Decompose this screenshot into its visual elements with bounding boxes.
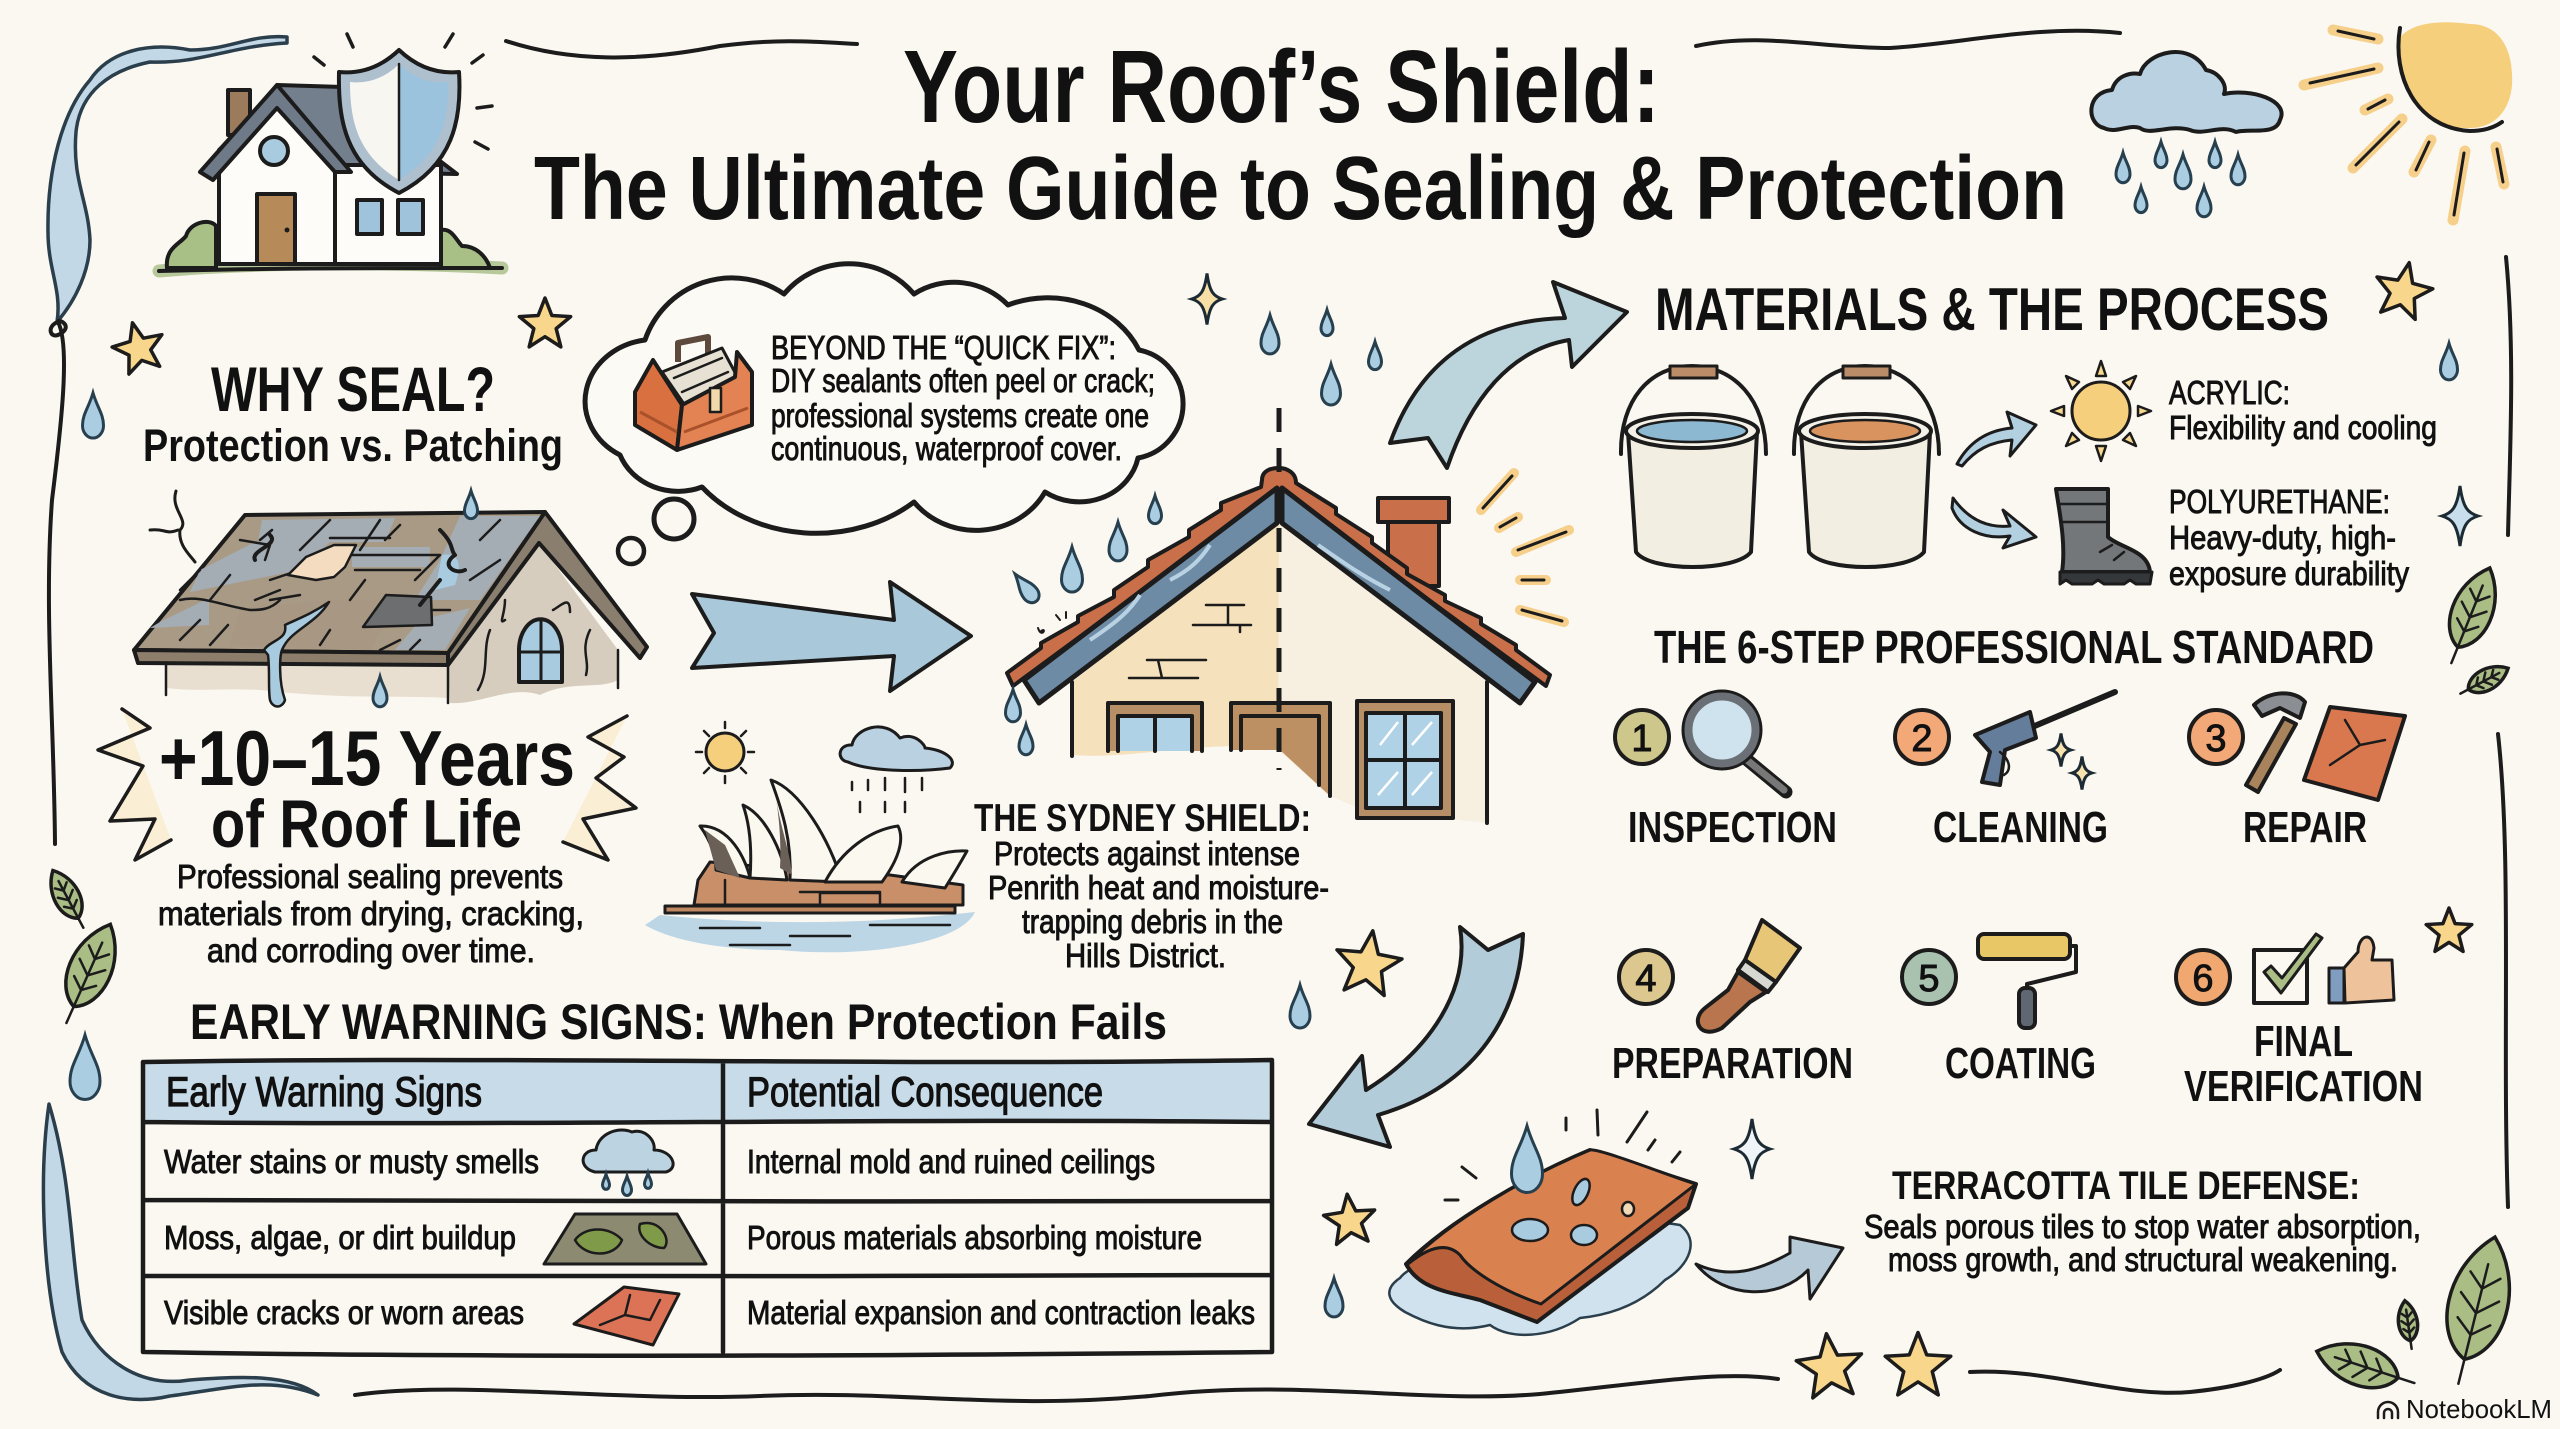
icon: rain cloud [2091, 52, 2282, 217]
heading: early warning signs: EARLY WARNING SIGNS: When Protection Fails [190, 994, 1167, 1050]
illustration: terracotta tile with water beads [1389, 1110, 1696, 1335]
arrow: to materials section [1390, 282, 1627, 468]
step 4: preparation: 4 [1635, 958, 1657, 1000]
text: beyond the quick fix: continuous, waterproof cover. [771, 430, 1122, 467]
text: polyurethane: POLYURETHANE: [2169, 483, 2390, 520]
decorative leaves [42, 560, 2523, 1402]
arrow: to acrylic [1957, 412, 2036, 466]
text: beyond the quick fix: professional systems create one [771, 397, 1149, 434]
step 6: final verification: 6 [2192, 958, 2214, 1000]
icon: bucket of polyurethane [1794, 366, 1939, 567]
illustration: damaged roof [134, 491, 647, 707]
table row 3: Material expansion and contraction leaks [747, 1294, 1255, 1331]
illustration: Sydney Opera House [645, 722, 975, 952]
table header row: Early Warning Signs [166, 1068, 482, 1115]
step 2: cleaning: 2 [1911, 718, 1933, 760]
thought bubble: beyond the quick fix [585, 264, 1183, 564]
step 6: final verification [2176, 934, 2423, 1111]
burst: +10-15 years of roof life [98, 709, 636, 862]
step 2: cleaning [1895, 692, 2115, 852]
step 6: final verification: FINAL [2254, 1017, 2353, 1066]
text: the Sydney shield: Protects against intense [994, 835, 1300, 872]
text: the Sydney shield: trapping debris in the [1022, 903, 1283, 940]
arrow: damaged roof to sealed house [692, 582, 971, 691]
text: terracotta tile defense: TERRACOTTA TILE DEFENSE: [1892, 1164, 2360, 1208]
icon: toolbox [635, 337, 752, 450]
arrow: down to terracotta tile [1309, 927, 1523, 1147]
table row 2: Porous materials absorbing moisture [747, 1219, 1202, 1256]
heading: materials and the process: MATERIALS & THE PROCESS [1655, 276, 2329, 343]
illustration: half-sealed house [1006, 408, 1569, 823]
step 4: preparation: PREPARATION [1612, 1039, 1853, 1088]
arrow: tile to text [1696, 1237, 1843, 1299]
decorative sparkles [1192, 274, 2478, 1179]
heading: why seal [143, 355, 563, 471]
table row 3: Visible cracks or worn areas [164, 1294, 524, 1331]
icon: house with shield [159, 34, 502, 271]
text: terracotta tile defense [1864, 1164, 2421, 1278]
text: terracotta tile defense: moss growth, and structural weakening. [1888, 1241, 2398, 1278]
text: beyond the quick fix: DIY sealants often peel or crack; [771, 362, 1155, 399]
burst: +10-15 years of roof life: +10–15 Years [159, 714, 575, 802]
text: polyurethane: Heavy-duty, high- [2169, 519, 2396, 556]
text: the Sydney shield [974, 797, 1329, 974]
heading: why seal: WHY SEAL? [211, 355, 495, 425]
icon: bucket of acrylic [1621, 366, 1766, 567]
text: the Sydney shield: Hills District. [1065, 937, 1226, 974]
text: acrylic: ACRYLIC: [2169, 374, 2290, 411]
watermark: NotebookLM: NotebookLM [2406, 1394, 2552, 1424]
heading: why seal: Protection vs. Patching [143, 420, 563, 471]
text: terracotta tile defense: Seals porous tiles to stop water absorption, [1864, 1208, 2421, 1245]
step 3: repair [2189, 693, 2405, 852]
table row 1 [164, 1130, 1155, 1195]
table row 1: Internal mold and ruined ceilings [747, 1143, 1155, 1180]
step 4: preparation [1612, 920, 1853, 1088]
text: professional sealing: materials from drying, cracking, [158, 895, 584, 932]
title: The Ultimate Guide to Sealing & Protection [534, 139, 2067, 239]
text: beyond the quick fix [771, 329, 1155, 467]
text: acrylic: Flexibility and cooling [2169, 409, 2437, 446]
step 5: coating: 5 [1918, 958, 1940, 1000]
decorative stars [108, 257, 2472, 1399]
table row 2 [164, 1214, 1202, 1264]
table header row [166, 1068, 1103, 1115]
step 5: coating [1902, 934, 2096, 1088]
icon: acrylic sun [2051, 361, 2151, 461]
step 1: inspection [1615, 691, 1837, 852]
table header row: Potential Consequence [747, 1068, 1103, 1115]
text: professional sealing: and corroding over time. [207, 932, 535, 969]
burst: +10-15 years of roof life: of Roof Life [211, 786, 522, 862]
step 5: coating: COATING [1945, 1039, 2096, 1088]
step 2: cleaning: CLEANING [1933, 803, 2108, 852]
decorative border: top-left water ribbon [48, 37, 287, 322]
title [534, 29, 2067, 239]
table row 1: Water stains or musty smells [164, 1143, 539, 1180]
text: polyurethane: exposure durability [2169, 555, 2409, 592]
text: acrylic [2169, 374, 2437, 446]
step 3: repair: REPAIR [2243, 803, 2367, 852]
heading: six-step standard: THE 6-STEP PROFESSIONAL STANDARD [1654, 621, 2374, 673]
text: professional sealing: Professional sealing prevents [177, 858, 563, 895]
decorative border: bottom-left water ribbon [43, 1104, 318, 1399]
text: professional sealing [158, 858, 584, 969]
decorative water drops [70, 343, 2458, 1317]
step 1: inspection: 1 [1631, 718, 1653, 760]
table row 2: Moss, algae, or dirt buildup [164, 1219, 516, 1256]
text: the Sydney shield: Penrith heat and moisture- [988, 869, 1329, 906]
water drops around the ridge [1261, 310, 1382, 405]
table row 3 [164, 1287, 1255, 1345]
text: polyurethane [2169, 483, 2409, 592]
icon: sun [2304, 22, 2512, 220]
table: warning signs and consequences [143, 1060, 1272, 1356]
title: Your Roof’s Shield: [903, 29, 1660, 144]
step 3: repair: 3 [2205, 718, 2227, 760]
arrow: to polyurethane [1952, 498, 2036, 548]
text: the Sydney shield: THE SYDNEY SHIELD: [974, 797, 1311, 840]
text: beyond the quick fix: BEYOND THE “QUICK FIX”: [771, 329, 1116, 366]
step 6: final verification: VERIFICATION [2184, 1062, 2423, 1111]
step 1: inspection: INSPECTION [1628, 803, 1837, 852]
icon: work boot [2056, 489, 2152, 584]
